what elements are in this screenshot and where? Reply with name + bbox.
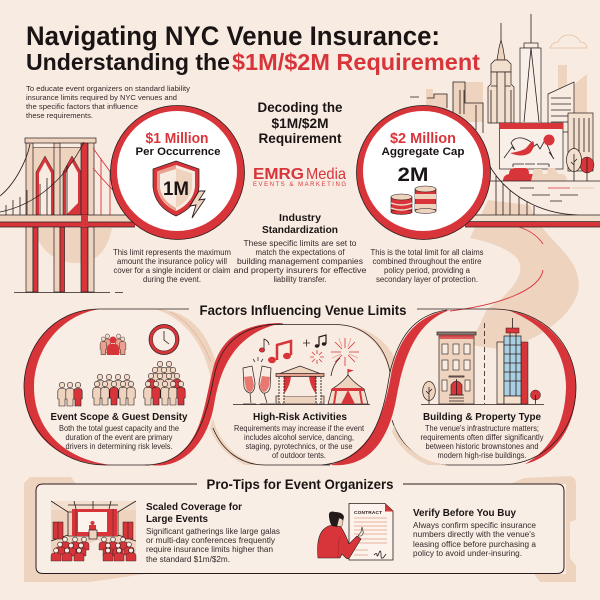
- text: verify: numbers directly with the venue's: [413, 530, 535, 539]
- text: building type: [420, 411, 544, 460]
- text: per occurrence description: cover for a single incident or claim: [114, 266, 230, 275]
- deck: [465, 215, 600, 221]
- icon: fireworks: [310, 338, 359, 376]
- center heading: decoding: Requirement: [258, 131, 342, 146]
- panel: high-risk activities: [145, 323, 395, 466]
- text: building type: Building & Property Type: [423, 411, 541, 423]
- red crescent left: [24, 309, 112, 465]
- text: high-risk: [234, 411, 365, 460]
- text: high-risk: includes alcohol service, dancing,: [244, 433, 354, 442]
- logo: EMRG Media: EMRG: [253, 166, 304, 183]
- ground line: [233, 404, 370, 406]
- logo: EMRG Media: [253, 166, 346, 188]
- intro text: the specific factors that influence: [26, 102, 138, 111]
- text: building type: between historic brownstones and: [426, 442, 538, 451]
- center text: industry standardization: [234, 213, 366, 284]
- text: scaled coverage: Scaled Coverage for: [146, 501, 242, 513]
- freedom tower: [520, 14, 541, 124]
- title: Navigating NYC Venue Insurance:: [26, 21, 440, 51]
- text: aggregate description: combined throughout the entire: [372, 257, 482, 266]
- lower tan crescent: [392, 425, 447, 465]
- icon: stage: [276, 366, 324, 404]
- icon: clock: [149, 324, 179, 354]
- ground line: [421, 404, 544, 406]
- text: verify: Verify Before You Buy: [413, 507, 516, 519]
- panel: building and property type: [322, 309, 576, 465]
- cable and suspenders: [488, 163, 578, 215]
- text: verify: [413, 507, 537, 558]
- circle: $2 Million aggregate cap: 2M: [398, 165, 428, 186]
- heading: pro-tips: Pro-Tips for Event Organizers: [206, 477, 394, 492]
- tan crescent shadow: [155, 309, 217, 380]
- pro-tips card: [36, 477, 564, 574]
- tan shadow behind pro-tips card: [24, 476, 576, 582]
- icon: large crowd: [144, 361, 185, 405]
- text: event scope: [50, 411, 188, 451]
- logo: EMRG Media: EVENTS & MARKETING: [253, 182, 346, 188]
- text: high-risk: High-Risk Activities: [253, 411, 347, 423]
- center text: industry standardization: These specific limits are set to: [244, 239, 357, 248]
- circle: $2 Million aggregate cap: Aggregate Cap: [382, 146, 465, 158]
- center heading: decoding: Decoding the: [258, 100, 343, 115]
- text: scaled coverage: Large Events: [146, 513, 208, 525]
- background building lines: [410, 82, 483, 133]
- illustration: contract review: [318, 504, 393, 560]
- icon: music notes: [259, 335, 326, 363]
- title: $1M/$2M Requirement: [232, 49, 480, 75]
- circle: $1 Million per occurrence: $1 Million: [146, 131, 208, 147]
- panel: event scope: [24, 309, 217, 465]
- text: per occurrence description: amount the insurance policy will: [117, 257, 227, 266]
- tan background buildings: [426, 65, 587, 122]
- icon: meeting group: [100, 334, 126, 355]
- intro text: insurance limits required by NYC venues and: [26, 93, 177, 102]
- text: scaled coverage: the standard $1m/$2m.: [146, 555, 230, 564]
- logo: EMRG Media: Media: [306, 166, 346, 183]
- center text: industry standardization: building management companies: [237, 257, 363, 266]
- tan crescent shadow: [345, 325, 395, 378]
- icon: coin stacks: [391, 186, 436, 214]
- icon: medium crowd: [93, 374, 135, 405]
- icon: street trees: [423, 382, 540, 404]
- trees: [566, 148, 594, 181]
- red crescent right: [510, 311, 576, 464]
- text: event scope: drivers in determining risk levels.: [66, 442, 172, 451]
- intro text: To educate event organizers on standard liability: [26, 84, 190, 93]
- center heading: decoding: [258, 100, 343, 146]
- title: Understanding the: [26, 49, 230, 75]
- intro text: these requirements.: [26, 111, 93, 120]
- red S curve: [330, 310, 450, 465]
- text: aggregate description: [370, 248, 484, 284]
- icon: shield with lightning: 1M: [163, 178, 189, 200]
- icon: high-rise: [497, 318, 528, 404]
- circle: $2 Million aggregate cap: [356, 106, 490, 240]
- text: building type: The venue's infrastructure matters;: [425, 424, 539, 433]
- text: building type: requirements often differ significantly: [420, 433, 544, 442]
- text: scaled coverage: Significant gatherings like large galas: [146, 527, 280, 536]
- text: aggregate description: This is the total limit for all claims: [370, 248, 484, 257]
- red S curve: [150, 323, 283, 466]
- center text: industry standardization: and property insurers for effective: [234, 266, 366, 275]
- circle: $1 Million per occurrence: [110, 106, 244, 240]
- text: high-risk: staging, pyrotechnics, or the use: [246, 442, 352, 451]
- text: event scope: Both the total guest capacity and the: [59, 424, 179, 433]
- text: per occurrence description: during the event.: [143, 275, 201, 284]
- text: high-risk: Requirements may increase if the event: [234, 424, 365, 433]
- text: verify: Always confirm specific insurance: [413, 521, 536, 530]
- audience silhouettes: [503, 168, 537, 181]
- text: scaled coverage: or multi-day conferences frequently: [146, 536, 275, 545]
- intro text: [26, 84, 190, 120]
- text: aggregate description: secondary layer of protection.: [376, 275, 478, 284]
- text: per occurrence description: [113, 248, 231, 284]
- cloud: [550, 35, 587, 48]
- text: per occurrence description: This limit represents the maximum: [113, 248, 231, 257]
- text: high-risk: of outdoor tents.: [272, 451, 326, 460]
- center text: industry standardization: Industry: [279, 213, 321, 224]
- title: [26, 21, 480, 75]
- text: event scope: Event Scope & Guest Density: [50, 411, 188, 423]
- divider dashed: [484, 323, 486, 404]
- text: verify: leasing office before purchasing a: [413, 540, 537, 549]
- right buildings: [548, 82, 574, 132]
- circle: $1 Million per occurrence: Per Occurrence: [136, 146, 220, 158]
- text: scaled coverage: require insurance limits higher than: [146, 545, 273, 554]
- icon: champagne glasses: [243, 357, 275, 404]
- illustration: Brooklyn Bridge: [0, 138, 135, 292]
- center heading: decoding: $1M/$2M: [272, 116, 328, 131]
- icon: circus tent: [328, 369, 368, 404]
- center text: industry standardization: liability transfer.: [274, 275, 326, 284]
- illustration: NYC skyline: [410, 14, 600, 227]
- illustration: contract review: CONTRACT: [354, 510, 382, 516]
- icon: brownstone: [437, 332, 476, 404]
- road accent curves: [450, 227, 543, 311]
- text: event scope: duration of the event are primary: [66, 433, 173, 442]
- empire state building: [488, 23, 514, 123]
- text: building type: modern high-rise buildings.: [438, 451, 526, 460]
- presentation board: [500, 123, 563, 169]
- text: verify: policy to avoid under-insuring.: [413, 549, 522, 558]
- heading: factors: Factors Influencing Venue Limits: [200, 303, 406, 318]
- person pointing: [318, 512, 363, 559]
- center text: industry standardization: match the expectations of: [256, 248, 345, 257]
- circle: $2 Million aggregate cap: $2 Million: [390, 131, 456, 147]
- icon: small crowd: [58, 382, 82, 406]
- illustration: conference room: [51, 501, 136, 561]
- water lines: [520, 188, 594, 201]
- center text: industry standardization: Standardization: [262, 225, 338, 236]
- text: scaled coverage: [146, 501, 280, 564]
- text: aggregate description: policy period, providing a: [384, 266, 471, 275]
- decorative road swoosh: [470, 200, 579, 350]
